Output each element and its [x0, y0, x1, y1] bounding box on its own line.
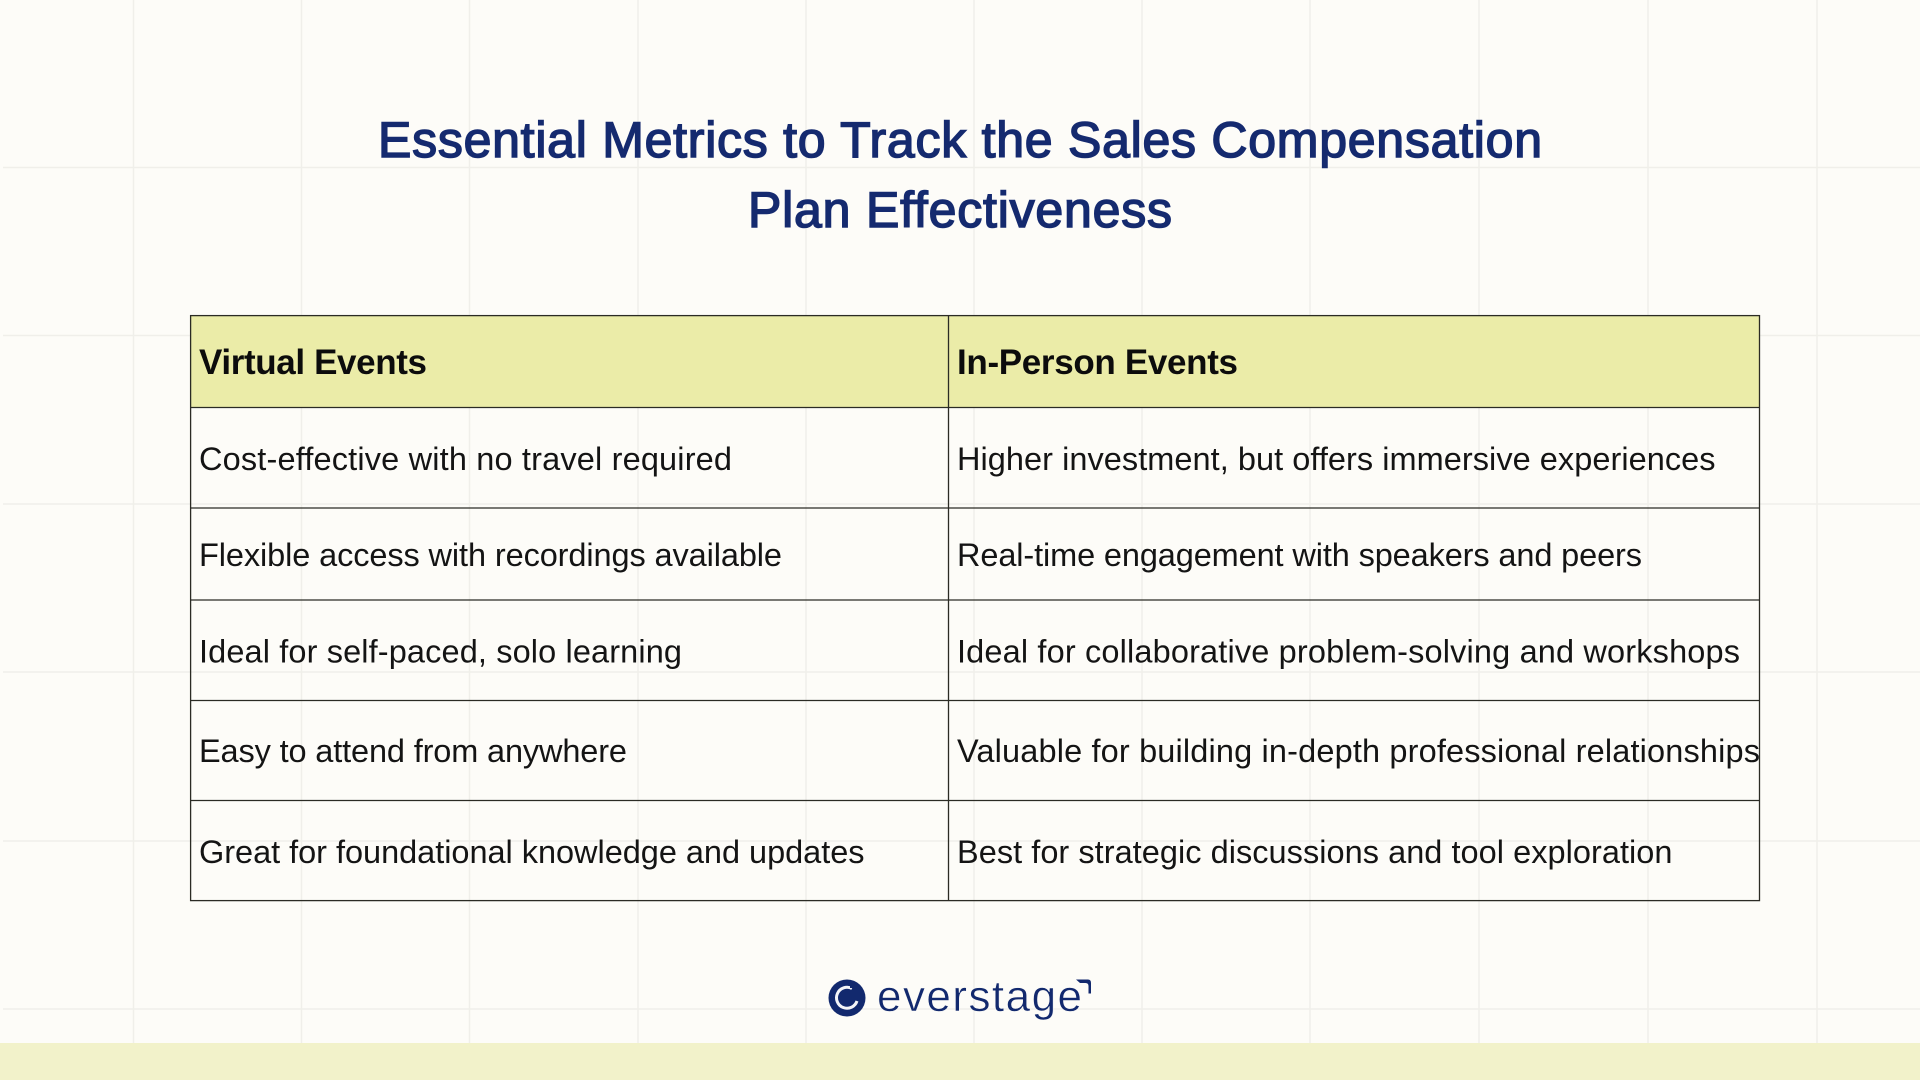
- icon: logo corner mark: [1076, 980, 1091, 994]
- table row 5: [199, 834, 1672, 870]
- table header row: [191, 316, 1759, 407]
- table row 3: [199, 634, 1740, 670]
- table grid lines: [191, 316, 1760, 901]
- table header row: Virtual Events: [199, 343, 427, 382]
- footer band: [0, 1043, 1920, 1080]
- table row 1: Cost-effective with no travel required: [199, 441, 732, 477]
- table row 4: Valuable for building in-depth professional relationships: [957, 733, 1760, 769]
- table row 2: Real-time engagement with speakers and peers: [957, 537, 1642, 573]
- table row 2: Flexible access with recordings available: [199, 537, 782, 573]
- comparison table: [191, 316, 1760, 901]
- title: [378, 112, 1542, 238]
- title: Essential Metrics to Track the Sales Compensation: [378, 112, 1542, 168]
- table row 3: Ideal for self-paced, solo learning: [199, 634, 682, 670]
- table row 4: [199, 733, 1760, 769]
- logo wordmark: everstage: [877, 972, 1082, 1021]
- table row 1: [199, 441, 1716, 477]
- table row 5: Great for foundational knowledge and updates: [199, 834, 864, 870]
- table header row: In-Person Events: [957, 343, 1238, 382]
- everstage logo: [828, 972, 1091, 1021]
- table row 4: Easy to attend from anywhere: [199, 733, 627, 769]
- icon: logo circle: [828, 980, 866, 1016]
- table row 5: Best for strategic discussions and tool exploration: [957, 834, 1672, 870]
- title: Plan Effectiveness: [748, 182, 1172, 238]
- table row 1: Higher investment, but offers immersive experiences: [957, 441, 1716, 477]
- table row 3: Ideal for collaborative problem-solving and workshops: [957, 634, 1740, 670]
- table row 2: [199, 537, 1642, 573]
